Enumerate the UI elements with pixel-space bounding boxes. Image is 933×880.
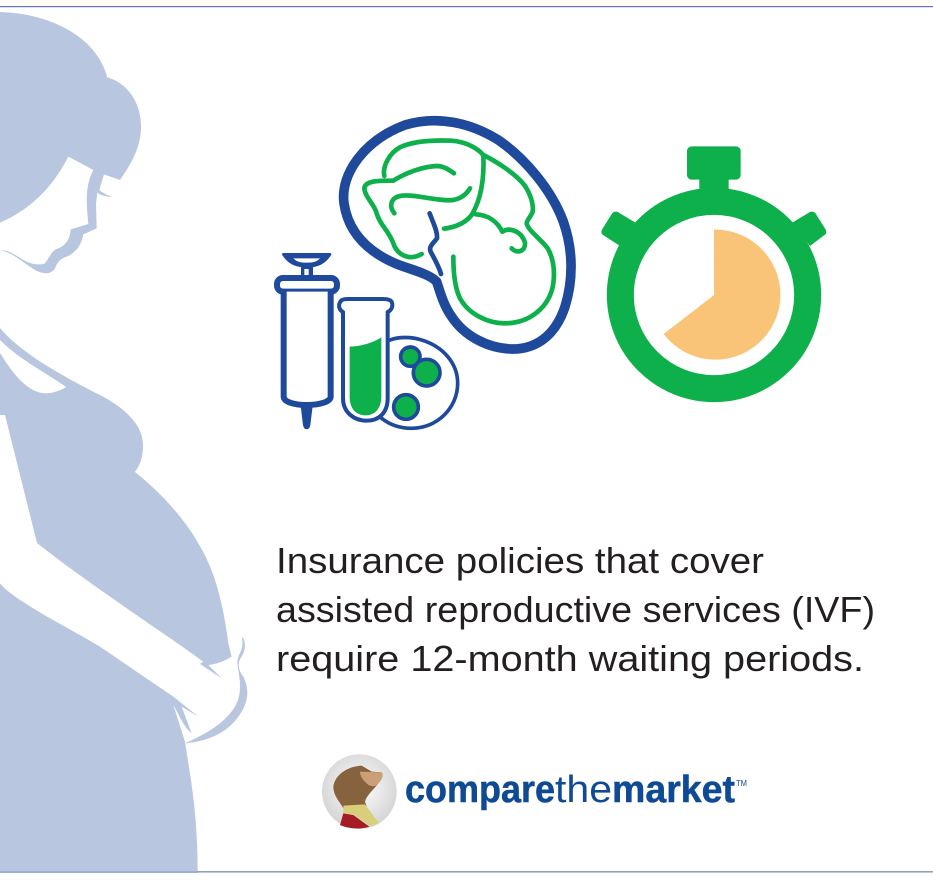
lower body and hand <box>0 583 247 872</box>
petri dish <box>382 337 458 428</box>
torso with belly <box>0 328 230 665</box>
umbilical cord <box>430 213 441 274</box>
womb outline <box>344 121 571 349</box>
wordmark: TM <box>736 779 747 788</box>
wordmark: market <box>612 769 735 811</box>
icon: syringe, test tube and petri dish <box>277 254 458 428</box>
body text: assisted reproductive services (IVF) <box>276 589 875 630</box>
elapsed time wedge <box>664 230 780 360</box>
meerkat badge <box>322 754 397 829</box>
side buttons <box>601 212 635 246</box>
wordmark: the <box>555 769 612 811</box>
icon: stopwatch <box>601 146 826 389</box>
body text <box>276 540 875 679</box>
lower body <box>0 583 198 872</box>
test tube <box>343 313 388 421</box>
fetus lines <box>364 141 554 323</box>
belly fingertips <box>200 643 232 678</box>
icon: fetus in womb <box>344 121 571 349</box>
wordmark: compare <box>405 769 555 811</box>
neckline cut-out <box>0 340 66 393</box>
body text: require 12-month waiting periods. <box>276 638 864 679</box>
top button <box>687 146 741 180</box>
silhouette: pregnant woman <box>0 12 247 872</box>
ring <box>620 201 808 389</box>
hair and face <box>0 12 141 273</box>
syringe <box>283 254 330 277</box>
logo: comparethemarket <box>322 754 747 829</box>
supporting hand <box>185 637 247 743</box>
body text: Insurance policies that cover <box>276 540 764 581</box>
wordmark <box>405 769 747 811</box>
